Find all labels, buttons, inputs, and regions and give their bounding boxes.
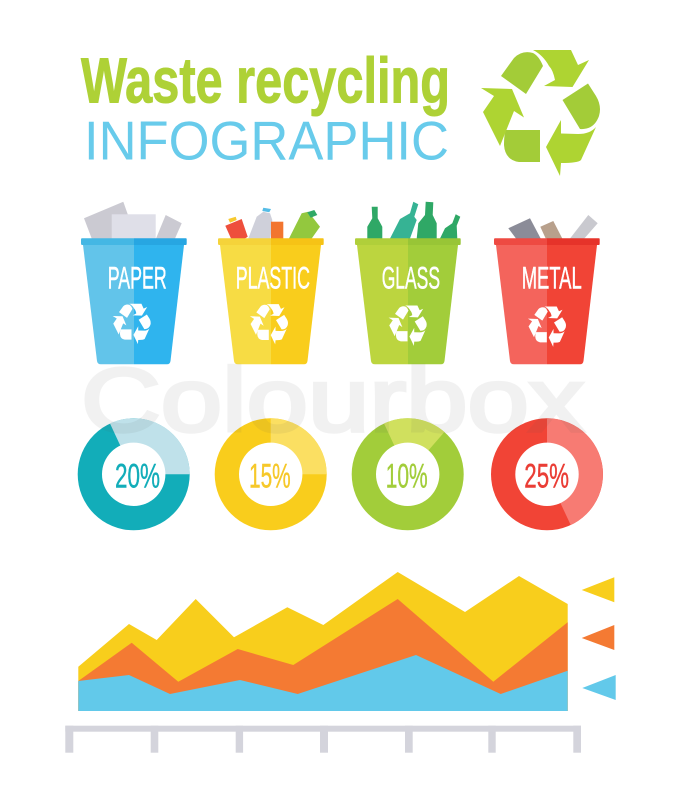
plastic bottles	[225, 208, 320, 238]
metal items	[508, 215, 598, 238]
donut: 10%	[352, 418, 464, 530]
chart axis	[65, 726, 581, 753]
title: Waste recycling	[81, 44, 450, 116]
label: PAPER	[108, 260, 167, 295]
bin body	[494, 238, 600, 364]
donut: 15%: 15%	[249, 457, 291, 495]
bin: glass	[355, 202, 461, 364]
label: PLASTIC	[236, 260, 310, 295]
donut: 20%: 20%	[115, 457, 160, 495]
bin: paper	[81, 202, 187, 364]
bin: metal	[494, 215, 600, 364]
bin: plastic	[218, 208, 324, 364]
legend arrow: blue	[582, 675, 616, 700]
donut: 10%: 10%	[386, 457, 428, 495]
area chart	[78, 572, 568, 711]
label: METAL	[522, 260, 582, 295]
icon: recycling	[389, 306, 427, 346]
bin body	[81, 238, 187, 364]
legend arrow: yellow	[582, 577, 614, 602]
icon: recycling symbol	[481, 50, 600, 176]
paper sheets	[84, 202, 182, 238]
donut: 20%	[78, 418, 190, 530]
glass bottles	[367, 202, 460, 238]
label: GLASS	[382, 260, 440, 295]
bin body	[218, 238, 324, 364]
legend arrow: orange	[582, 625, 614, 650]
icon: recycling	[250, 304, 288, 344]
icon: recycling	[528, 306, 566, 347]
donut: 25%: 25%	[524, 457, 569, 495]
icon: recycling	[113, 304, 151, 344]
bin body	[355, 238, 461, 364]
subtitle: INFOGRAPHIC	[84, 111, 449, 172]
donut: 15%	[215, 418, 327, 530]
donut: 25%	[491, 418, 603, 530]
watermark: Colourbox	[81, 351, 584, 451]
